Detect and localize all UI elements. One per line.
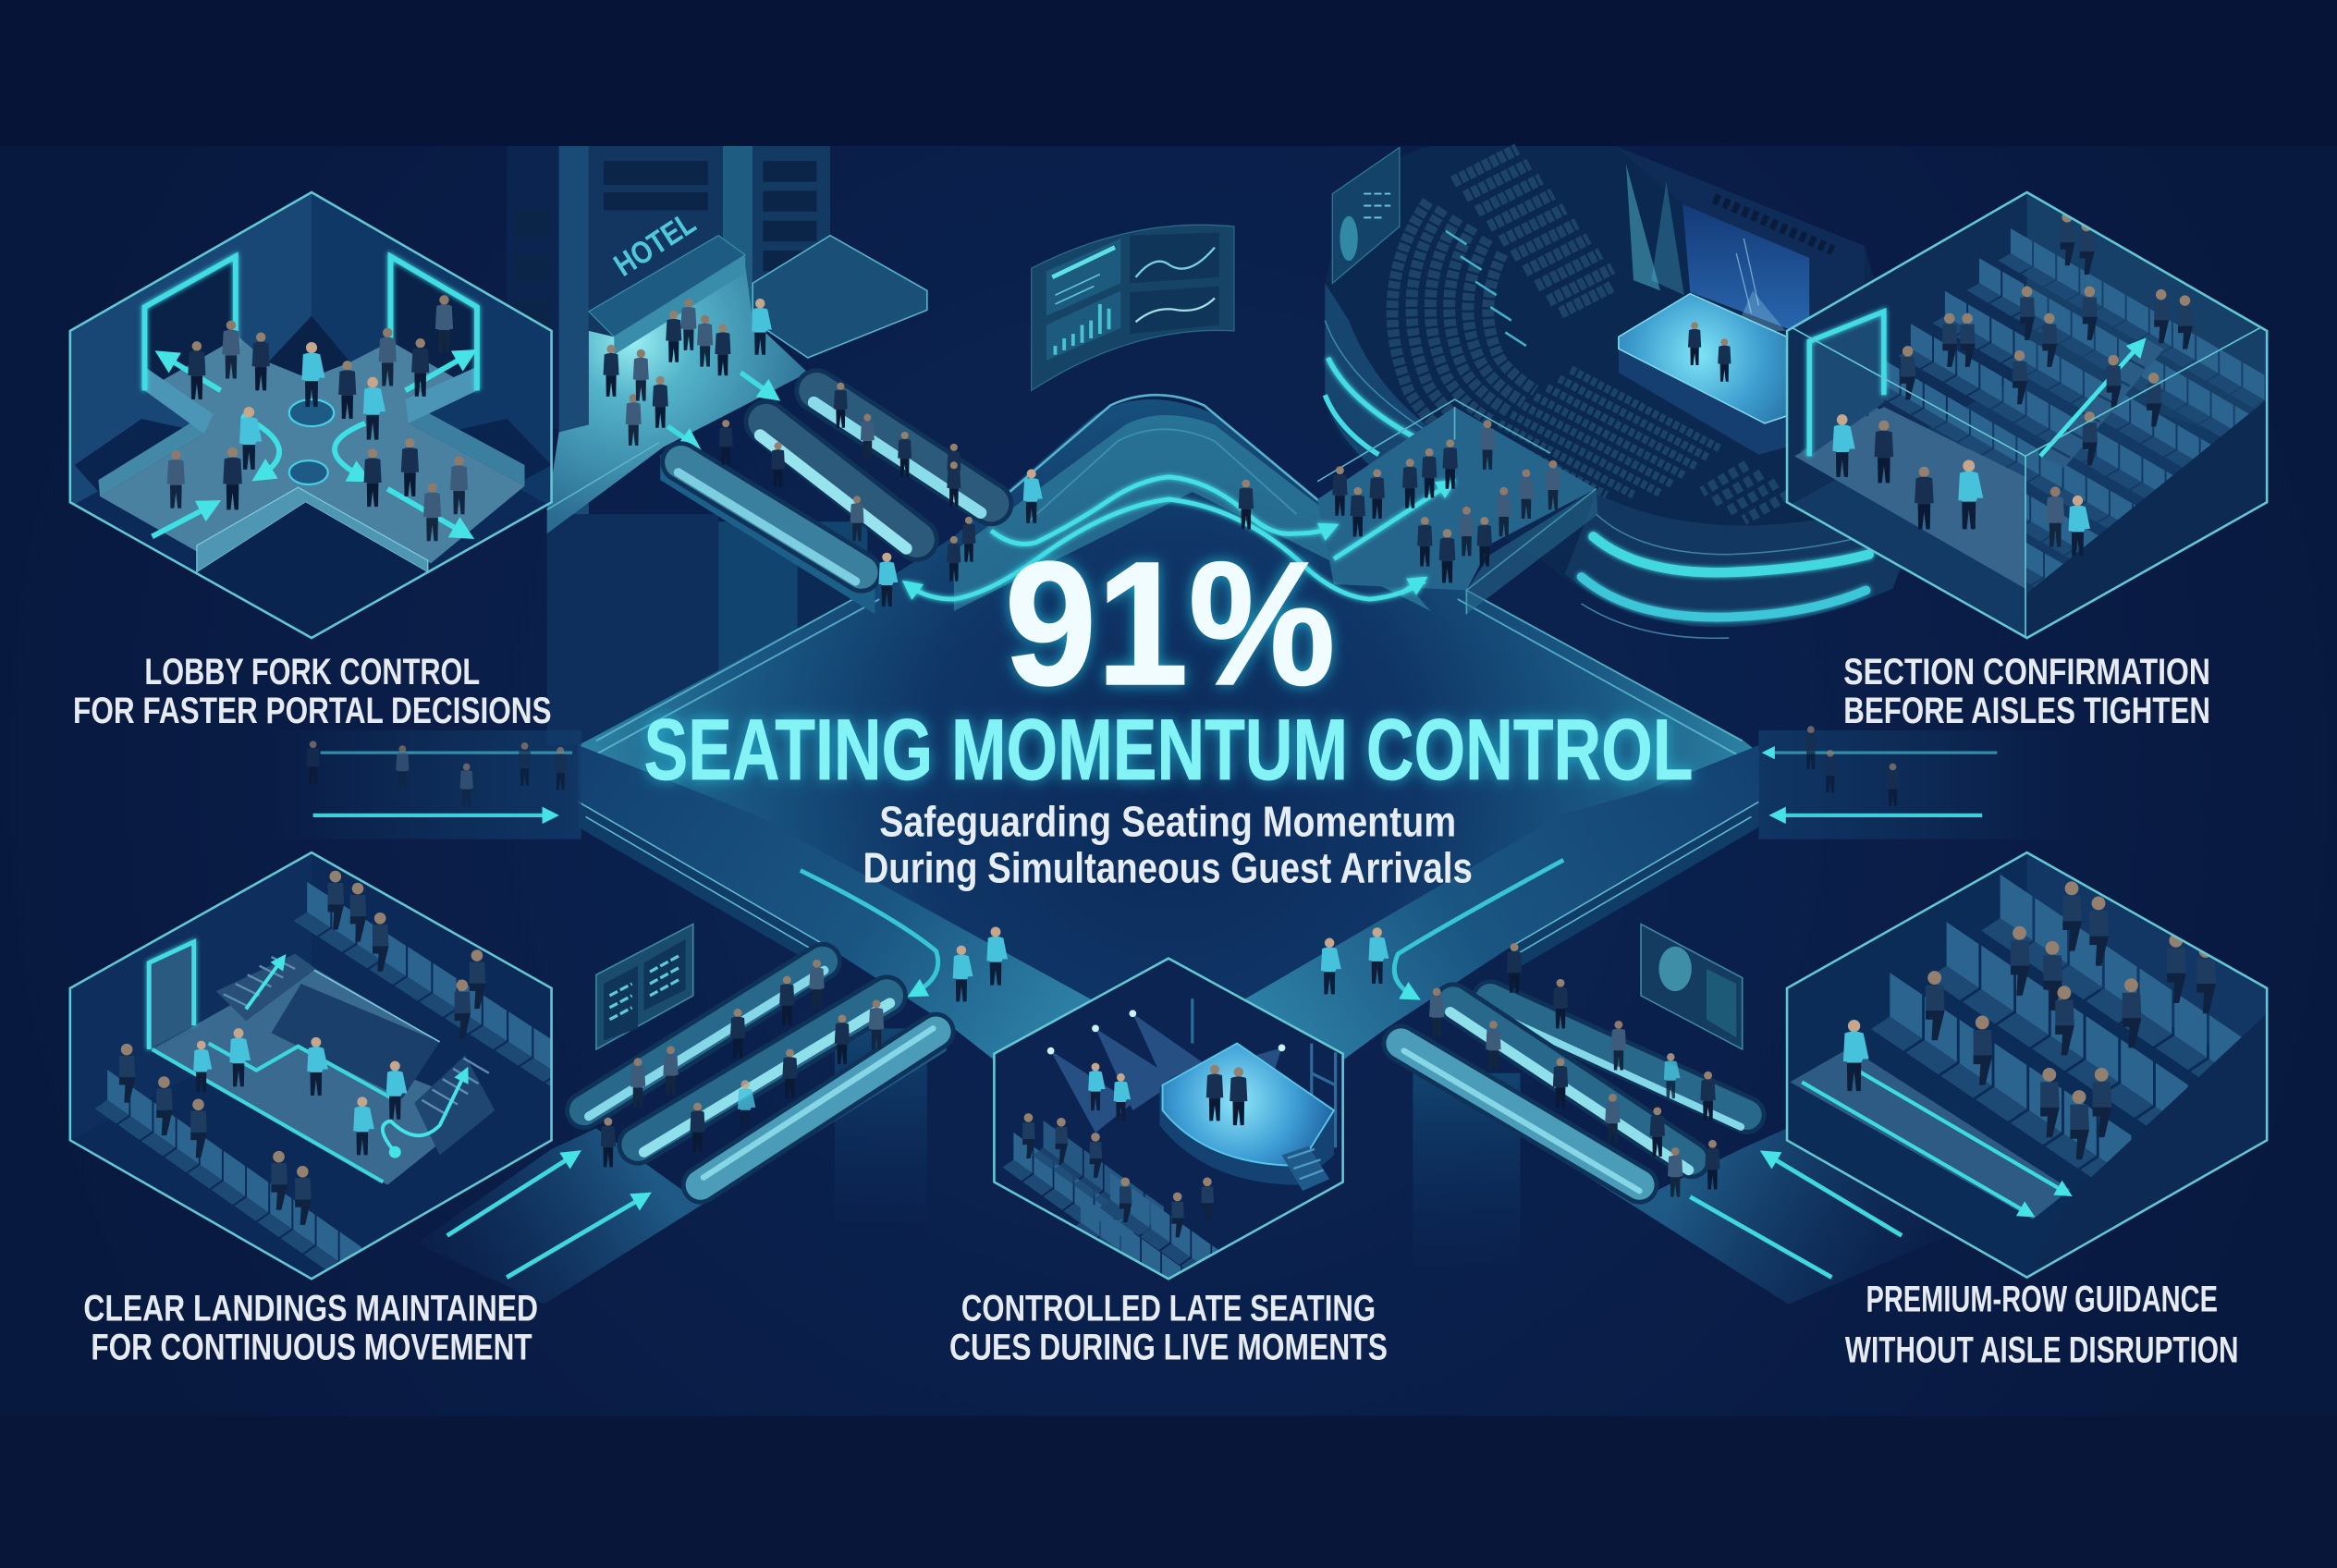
dashboard panel: bottom right [1641,925,1743,1049]
bottom-left escalator riders [601,960,884,1167]
door frame [149,942,194,1049]
front seating block [1702,465,1789,521]
upper plaza staff and guests [878,469,1254,606]
lobby people [167,295,468,541]
upper stairs [216,954,316,1021]
curved seating arcs [1392,202,1536,440]
floor discs [289,399,334,484]
usher [1843,1020,1869,1091]
hexagon frame: late seating [994,959,1343,1279]
portal dark openings [148,262,233,380]
aisle floor [1790,1047,2070,1219]
upper seating row [294,882,551,1086]
raised wall sections [197,487,428,572]
lower seating block [1475,370,1720,496]
label: premium row [1845,1279,2239,1371]
label: late seating: CONTROLLED LATE SEATING [961,1287,1376,1329]
standing guests and staff [1832,414,2090,556]
lower seating row [94,1070,361,1269]
main stage platform [1619,294,1787,455]
audience [1022,1063,1214,1237]
label: section confirmation: SECTION CONFIRMATION [1843,651,2210,692]
hotel plaza guests [604,299,772,446]
theatre auditorium [1325,146,1923,638]
aisle light marks [1446,231,1526,346]
hotel sign canopy [589,205,745,355]
hotel sign canopy: HOTEL [608,205,702,284]
hexagon frame: section [1787,192,2267,638]
hotel plaza arrows [667,373,772,444]
upper-left escalators [660,383,991,614]
staff [193,1028,407,1155]
right lower arm [1243,745,1758,1061]
corridor guests right [1805,726,1900,806]
label: clear landings [83,1287,538,1367]
hexagon frame: landings [70,852,552,1279]
subtitle: During Simultaneous Guest Arrivals [863,843,1473,891]
guidance paths [153,1044,395,1182]
left junction staff [953,927,1008,1001]
landing floor [153,969,435,1185]
audience seats [1002,1121,1230,1317]
seated guests [119,871,485,1225]
right arm guide arrow [1394,860,1563,996]
corridor guests left [307,741,567,806]
left arm guide arrow [801,871,938,993]
label: lobby fork: FOR FASTER PORTAL DECISIONS [73,690,552,731]
curved wall with light bands [1325,283,1490,514]
aisle guide lines [1802,1071,2066,1213]
truss [1193,998,1336,1155]
bottom-right walkway [1389,1039,1958,1305]
hotel tower [507,146,830,519]
dashboard panel: top centre [1032,225,1234,390]
upper-left escalator riders [719,383,975,582]
hotel entrance plaza [547,205,927,533]
label: section confirmation [1843,651,2210,731]
label: clear landings: CLEAR LANDINGS MAINTAINED [83,1287,538,1329]
seated guests [1926,881,2216,1159]
flow arrows [153,355,468,536]
aisle arrow [2040,344,2140,456]
wall screen [1332,148,1400,283]
label: lobby fork: LOBBY FORK CONTROL [144,651,480,692]
performers [1206,1065,1247,1125]
bottom-left walkway [417,1028,947,1305]
central plaza [579,395,1758,1044]
bottom-right support column [1413,1073,1520,1267]
dashboard panel: bottom left [596,925,693,1049]
seating rows [1800,228,2265,586]
right plaza deck [1317,399,1597,614]
side dark wedges [75,419,552,494]
glass cube lines [1787,325,2266,640]
bottom-right escalators [1401,998,1747,1191]
plaza flow arrows [909,477,1449,599]
panel: premium row [1787,852,2337,1309]
stepped lower right [2027,399,2267,638]
confirmation floor [1794,407,2025,589]
door [1809,312,1884,456]
stage backdrop [1616,146,1865,358]
panel: clear landings [71,854,551,1278]
corridor left [268,730,581,839]
subtitle: Safeguarding Seating Momentum [879,797,1456,845]
hexagon frame: lobby [70,192,552,638]
stage base [1159,1071,1334,1185]
corridor right [1758,726,2072,839]
support columns under upper-left bridge [547,514,872,745]
label: lobby fork [73,651,552,731]
headline stat: 91% [1005,526,1336,722]
hexagon frame: premium [1787,852,2267,1278]
aisle stairs [2040,338,2164,468]
panel: late seating stage [994,959,1343,1317]
bottom-left support column [835,1028,927,1222]
theatre stepped base with glow bands [1565,494,1923,638]
bottom-left escalators [584,962,936,1185]
left lower arm [579,745,1093,1061]
cyan portal frames [144,256,477,390]
spotlight lamps [1047,1010,1285,1054]
panel: lobby fork control [70,192,552,638]
label: late seating [949,1287,1388,1367]
right plaza guests [1332,420,1560,582]
lower stairs [414,1055,495,1155]
label: late seating: CUES DURING LIVE MOMENTS [949,1326,1388,1367]
subtitle [863,797,1473,891]
seat rows [1871,875,2337,1309]
stage steps [1282,1146,1329,1191]
spotlights [1051,1013,1282,1133]
main title: SEATING MOMENTUM CONTROL [644,701,1693,798]
label: section confirmation: BEFORE AISLES TIGHTEN [1843,690,2210,731]
label: clear landings: FOR CONTINUOUS MOVEMENT [91,1326,532,1367]
inner dark well [271,984,440,1098]
stepped lower right [2027,1013,2267,1278]
X-shaped floor [100,337,525,563]
right junction staff [1321,927,1389,994]
seated guests [1901,212,2193,465]
panel: section confirmation [1787,192,2288,640]
stage disc [1163,1044,1334,1166]
upper seating block [1453,149,1612,313]
bottom-right escalator riders [1429,943,1720,1197]
